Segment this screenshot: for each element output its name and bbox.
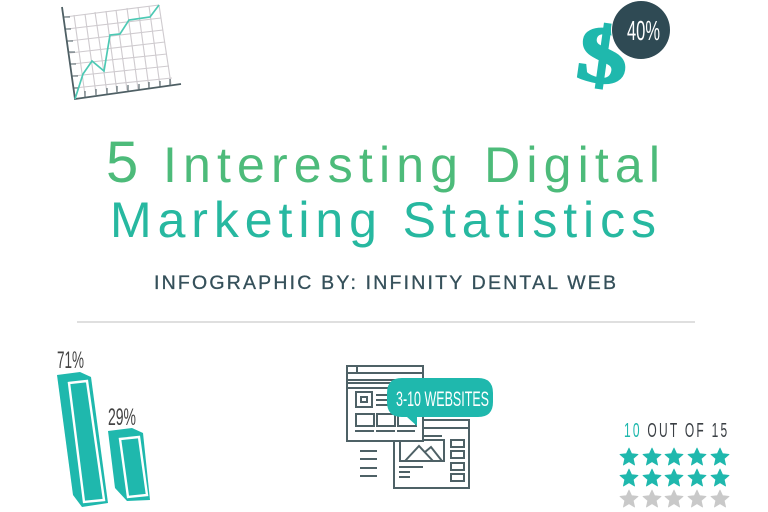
stars: grey: [620, 490, 729, 507]
bar chart: 71% vs 29%: [57, 347, 150, 507]
label: 71%: 71%: [57, 347, 84, 374]
icon: dollar sign with 40% badge: [572, 0, 671, 103]
label: 3-10 websites: 3-10 WEBSITES: [396, 388, 489, 411]
icon: dollar sign with 40% badge: $: [572, 7, 634, 103]
icon: website windows with speech bubble: [347, 366, 493, 488]
icon: dollar sign with 40% badge: 40%: [627, 15, 660, 46]
subtitle: INFOGRAPHIC BY: INFINITY DENTAL WEB: [154, 272, 616, 294]
stars: teal: [620, 448, 729, 486]
rating: 10 out of 15: [620, 420, 729, 507]
icon: line chart: [62, 5, 181, 99]
title: [106, 130, 660, 248]
title: 5: [106, 130, 138, 195]
title: Interesting Digital: [163, 137, 660, 193]
label: 10 out of 15: 10 OUT OF 15: [624, 420, 727, 442]
label: 29%: 29%: [108, 404, 136, 431]
title: Marketing Statistics: [110, 192, 656, 248]
